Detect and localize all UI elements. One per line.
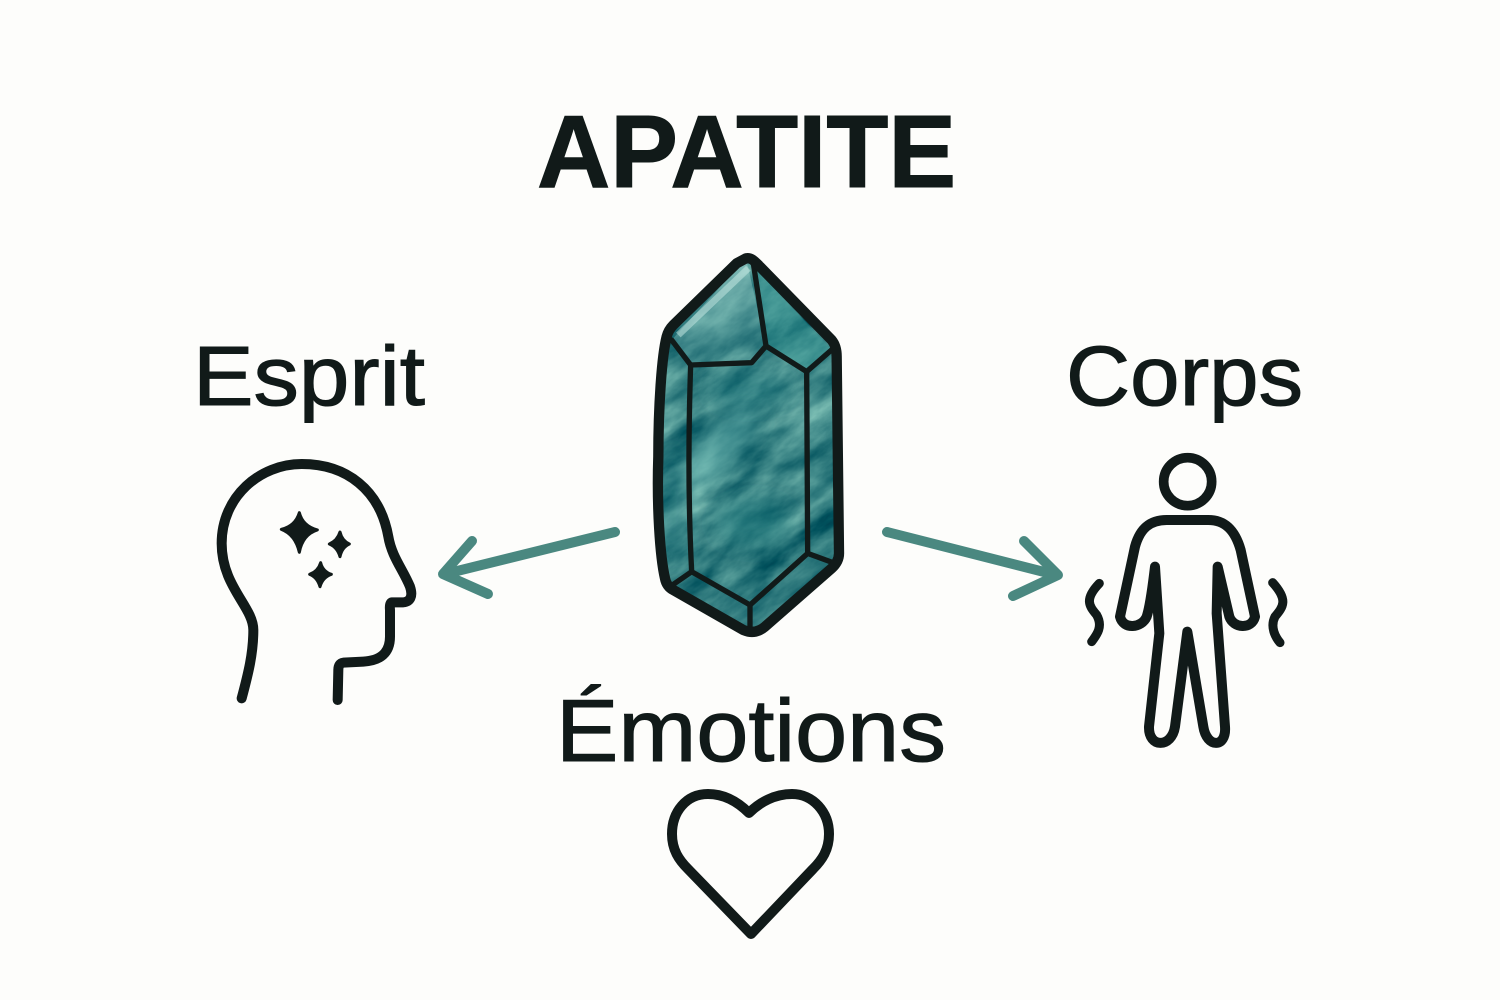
label: Émotions: Émotions	[556, 681, 946, 780]
head	[1164, 458, 1212, 506]
icon: head with sparkles	[222, 464, 411, 700]
arrow: to Esprit	[443, 532, 615, 594]
icon: apatite crystal	[652, 253, 844, 638]
crystal texture	[663, 264, 834, 627]
arrow: to Corps	[887, 532, 1058, 596]
title: APATITE	[537, 94, 956, 209]
label: Corps: Corps	[1066, 329, 1303, 423]
crystal facet lines	[670, 263, 835, 630]
right wave	[1273, 583, 1283, 643]
crystal outline	[658, 258, 839, 632]
icon: heart	[672, 794, 829, 934]
body outline	[1120, 520, 1255, 743]
label: Esprit: Esprit	[193, 329, 425, 423]
left wave	[1089, 583, 1099, 642]
icon: body with energy waves	[1089, 458, 1283, 743]
head outline	[222, 464, 411, 700]
sparkles	[281, 513, 349, 587]
